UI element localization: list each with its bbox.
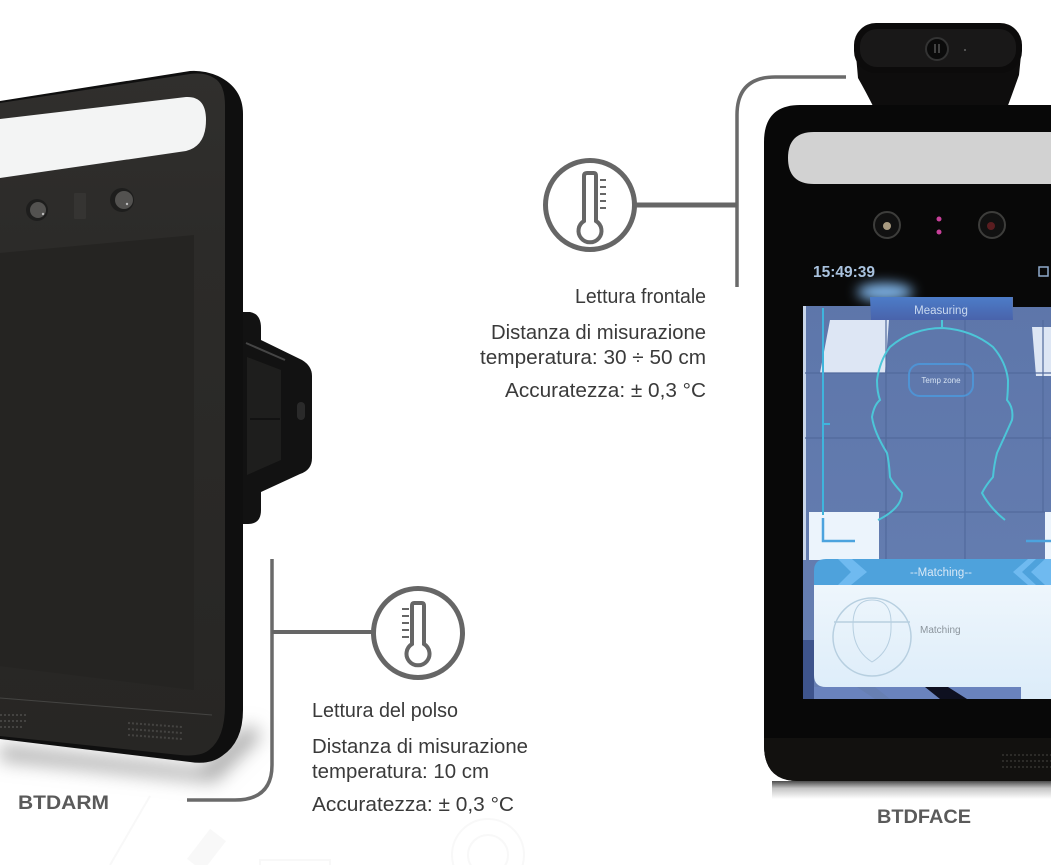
screen: Temp zone [921,376,961,385]
matching text: Matching [920,625,961,636]
text: frontale: Accuratezza: ± 0,3 °C [505,380,706,402]
matching panel [814,585,1051,699]
lower bezel [764,738,1051,781]
lower left strip [803,640,814,699]
seam [0,698,212,715]
device body [764,105,1051,781]
device shadow [772,781,1051,799]
branch line: frontale [636,202,737,208]
temp zone [909,364,973,396]
camera right [979,212,1005,238]
white tiles [820,320,889,373]
label: BTDARM: BTDARM [18,793,109,814]
text: frontale: Lettura frontale [575,286,706,308]
screen panel [0,235,194,690]
front face [0,74,225,755]
text: frontale [480,286,706,402]
text: frontale: Distanza di misurazione [491,322,706,344]
camera right [110,188,134,212]
product: BTDARM tablet [0,71,312,782]
connector line: frontale [737,77,846,287]
text: polso: Distanza di misurazione [312,736,528,758]
measuring label: Measuring [914,305,968,317]
matching header [814,559,1051,585]
icon: thermometer frontale [546,160,634,250]
branch line: polso [272,630,373,634]
product: BTDFACE tablet [764,23,1051,799]
device body [0,71,243,763]
clock: 15:49:39 [813,264,875,281]
light bar [788,132,1051,184]
camera left [26,199,48,221]
scan frame [822,308,830,515]
screen [803,283,1051,699]
tile grid [805,320,1051,560]
camera glow [857,283,913,301]
label: BTDFACE: BTDFACE [877,807,971,828]
device shadow [0,725,262,782]
light bar [0,97,206,178]
text: polso: Accuratezza: ± 0,3 °C [312,794,514,816]
chevrons [838,559,1051,585]
text: polso [312,700,528,816]
speaker [1002,755,1051,767]
text: frontale: temperatura: 30 ÷ 50 cm [480,347,706,369]
bottom strip [814,687,1021,699]
camera left [874,212,900,238]
sensor [74,193,86,219]
thermal camera module [854,23,1022,108]
connector line: polso [187,559,272,800]
wrist reader [240,312,312,524]
speakers [0,715,182,739]
status icon [1039,267,1048,276]
head outline [872,328,1012,520]
background watermark icons [110,796,524,865]
camera view [803,297,1051,699]
face scan [833,598,911,676]
text: polso: temperatura: 10 cm [312,761,489,783]
icon: thermometer polso [374,588,462,678]
matching title: --Matching-- [910,567,972,579]
LEDs [936,216,942,234]
measuring tab [870,297,1013,320]
text: polso: Lettura del polso [312,700,458,722]
left edge highlight [803,306,806,560]
